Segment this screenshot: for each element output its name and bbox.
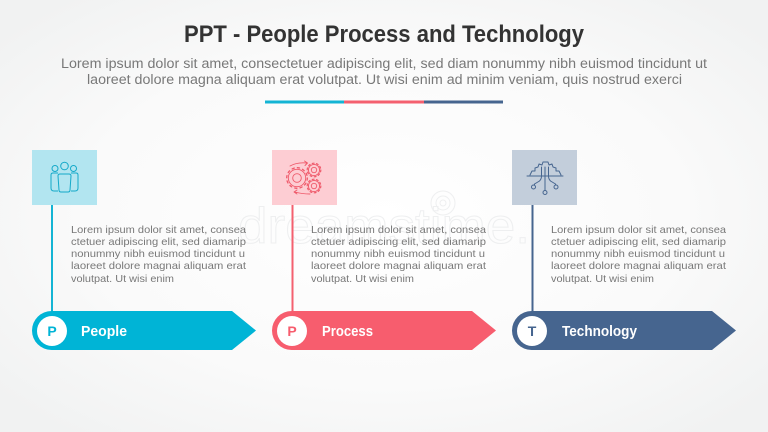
body text: process: laoreet dolore magnai aliquam erat — [311, 260, 486, 272]
icon tile: technology — [512, 150, 577, 205]
body text: people: laoreet dolore magnai aliquam erat — [71, 260, 246, 272]
subtitle text: laoreet dolore magna aliquam erat volutpat. Ut wisi enim ad minim veniam, quis nostrud exerci — [87, 72, 682, 87]
tri-colour divider — [265, 100, 503, 104]
arrow banner: technology: Technology — [562, 324, 637, 340]
body text: technology: ctetuer adipiscing elit, sed diamarip — [551, 236, 726, 248]
body text: people: volutpat. Ut wisi enim — [71, 273, 174, 285]
title: PPT - People Process and Technology — [184, 21, 585, 48]
body text: process: Lorem ipsum dolor sit amet, consea — [311, 224, 486, 236]
body text: technology: volutpat. Ut wisi enim — [551, 273, 654, 285]
arrow banner: process — [272, 311, 496, 350]
arrow banner: process: P — [287, 323, 297, 339]
arrow banner: people — [32, 311, 256, 350]
watermark: dreamstime. — [238, 198, 530, 254]
panel: technology — [512, 150, 736, 350]
subtitle text: Lorem ipsum dolor sit amet, consectetuer adipiscing elit, sed diam nonummy nibh euismod tincidunt ut — [61, 56, 707, 71]
connector line: technology — [532, 205, 534, 312]
body text: process: nonummy nibh euismod tincidunt u — [311, 248, 485, 260]
body text: technology: Lorem ipsum dolor sit amet, consea — [551, 224, 726, 236]
body text: process: volutpat. Ut wisi enim — [311, 273, 414, 285]
body text: people: Lorem ipsum dolor sit amet, consea — [71, 224, 246, 236]
arrow banner: process: Process — [322, 324, 373, 340]
arrow banner: people: P — [47, 323, 57, 339]
panel: process — [272, 150, 496, 350]
body text: people — [71, 224, 246, 285]
connector line: people — [51, 205, 53, 312]
panel: people — [32, 150, 256, 350]
connector line: process — [292, 205, 294, 312]
subtitle text — [61, 56, 707, 87]
body text: people: nonummy nibh euismod tincidunt u — [71, 248, 245, 260]
arrow banner: people: People — [81, 324, 127, 340]
arrow banner: technology — [512, 311, 736, 350]
icon tile: process — [272, 150, 337, 205]
arrow banner: technology: T — [528, 323, 537, 339]
body text: technology: nonummy nibh euismod tincidunt u — [551, 248, 725, 260]
body text: process — [311, 224, 486, 285]
body text: technology: laoreet dolore magnai aliquam erat — [551, 260, 726, 272]
body text: people: ctetuer adipiscing elit, sed diamarip — [71, 236, 246, 248]
body text: process: ctetuer adipiscing elit, sed diamarip — [311, 236, 486, 248]
icon tile: people — [32, 150, 97, 205]
body text: technology — [551, 224, 726, 285]
